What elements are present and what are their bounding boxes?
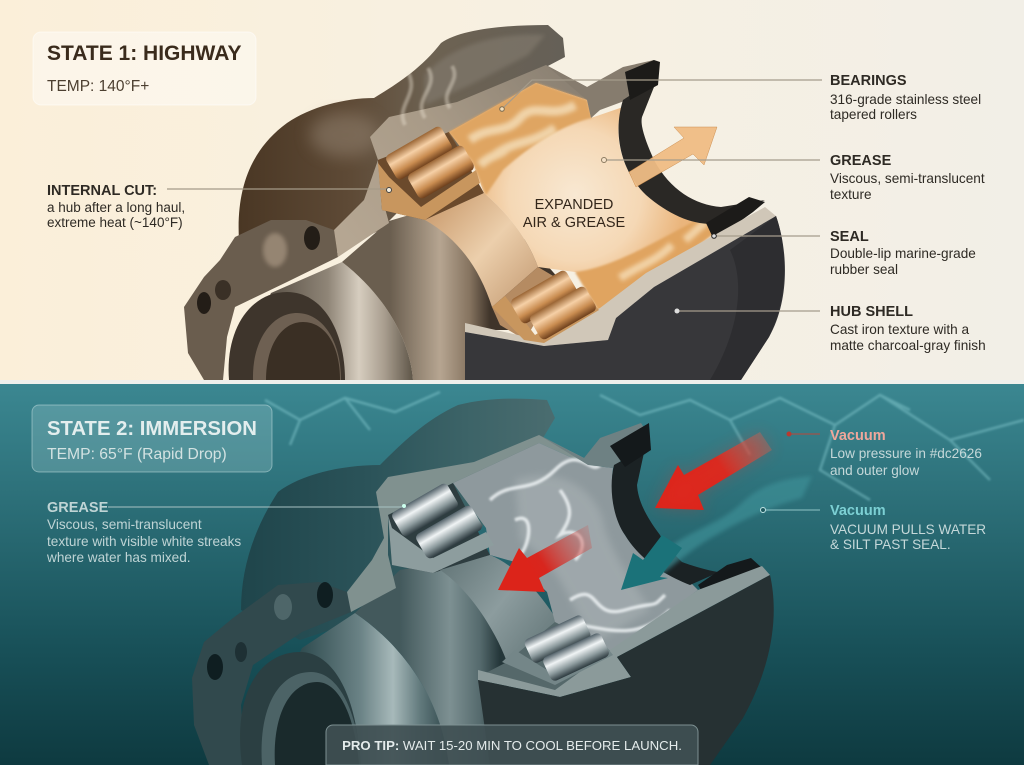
callout: grease: texture bbox=[830, 187, 872, 202]
callout: hub shell: Cast iron texture with a bbox=[830, 322, 969, 337]
callout: bearings: BEARINGS bbox=[830, 73, 907, 89]
chamber bbox=[449, 83, 695, 272]
callout: hub shell: HUB SHELL bbox=[830, 304, 913, 320]
bronze bottom filler bbox=[492, 267, 553, 336]
grease upper highlights bbox=[470, 105, 575, 165]
flow arrow bbox=[629, 127, 717, 187]
label: expanded air and grease: AIR & GREASE bbox=[523, 215, 625, 231]
grease upper bbox=[449, 83, 592, 195]
callout: hub shell: matte charcoal-gray finish bbox=[830, 338, 986, 353]
upper roller cage bbox=[378, 163, 480, 220]
grease lower bbox=[574, 222, 712, 309]
callout: vacuum pulls water: VACUUM PULLS WATER bbox=[830, 522, 986, 537]
seal top bbox=[610, 423, 651, 467]
callout: seal: rubber seal bbox=[830, 262, 898, 277]
red arrow lower bbox=[498, 525, 592, 592]
panel box: state 2: STATE 2: IMMERSION bbox=[47, 418, 257, 440]
callout: bearings: 316-grade stainless steel bbox=[830, 92, 981, 107]
pro tip bar: PRO TIP: WAIT 15-20 MIN TO COOL BEFORE LAUNCH. bbox=[342, 738, 682, 753]
callout: internal cut bbox=[47, 183, 392, 230]
callout: grease mixed: Viscous, semi-translucent bbox=[47, 517, 202, 532]
flange bolt holes bbox=[207, 582, 333, 680]
panel box: state 2: TEMP: 65°F (Rapid Drop) bbox=[47, 446, 227, 463]
water caustics bbox=[265, 392, 1024, 500]
silver race bbox=[440, 555, 560, 662]
seal housing bbox=[539, 423, 649, 468]
flange bolt holes bbox=[197, 226, 320, 314]
pro tip bar bbox=[326, 725, 698, 765]
bore bbox=[262, 672, 361, 765]
callout: grease mixed: where water has mixed. bbox=[46, 550, 191, 565]
divider bbox=[0, 380, 1024, 384]
callout: vacuum low pressure: and outer glow bbox=[830, 463, 919, 478]
barrel inner bbox=[342, 193, 560, 380]
callout: bearings: tapered rollers bbox=[830, 107, 917, 122]
white water streaks bbox=[490, 460, 670, 631]
callout: grease mixed: texture with visible white streaks bbox=[47, 534, 241, 549]
callout: vacuum pulls water: Vacuum bbox=[830, 503, 886, 519]
upper rollers bbox=[384, 125, 476, 200]
lower cage bbox=[502, 645, 613, 685]
lower shell facet bbox=[710, 216, 784, 380]
panel box: state 1 bbox=[33, 32, 256, 105]
hub cutaway illustration: immersion bbox=[192, 399, 774, 765]
lower rollers bbox=[523, 614, 610, 682]
label: expanded air and grease: EXPANDED bbox=[535, 197, 613, 213]
grease chamber bbox=[453, 443, 698, 652]
callout: grease mixed bbox=[46, 500, 406, 565]
label: expanded air and grease bbox=[523, 199, 625, 227]
shell top lobe highlight bbox=[425, 35, 545, 105]
seal crescent bbox=[619, 77, 765, 224]
roller pocket bbox=[378, 132, 484, 220]
hub back shell bbox=[239, 25, 565, 270]
ring bbox=[240, 652, 360, 765]
seal bottom bbox=[698, 558, 762, 598]
lower roller cage bbox=[492, 296, 599, 343]
barrel inner bbox=[355, 555, 560, 765]
heat wisps bbox=[403, 66, 455, 125]
callout: hub shell bbox=[674, 304, 986, 353]
seal housing bbox=[546, 60, 658, 118]
callout: vacuum low pressure: Low pressure in #dc2626 bbox=[830, 446, 982, 461]
lower shell bbox=[465, 216, 785, 380]
callout: grease mixed: GREASE bbox=[47, 500, 109, 516]
callout: grease bbox=[601, 155, 985, 199]
callout: internal cut: extreme heat (~140°F) bbox=[47, 215, 183, 230]
upper rollers bbox=[390, 482, 484, 560]
lower rollers bbox=[509, 269, 598, 341]
shell left highlight bbox=[310, 113, 380, 157]
grease chamber lighter centre bbox=[515, 476, 650, 640]
bore bbox=[253, 313, 341, 380]
cut face bbox=[334, 65, 587, 257]
lower shell cut band bbox=[465, 207, 776, 346]
seal top bbox=[625, 60, 660, 100]
barrel outer bbox=[270, 262, 413, 380]
callout: seal: SEAL bbox=[830, 229, 869, 245]
upper cage bbox=[388, 515, 494, 573]
callout: vacuum pulls water: & SILT PAST SEAL. bbox=[830, 537, 951, 552]
callout: seal bbox=[711, 231, 976, 274]
seal bottom bbox=[706, 197, 765, 235]
panel box: state 1: STATE 1: HIGHWAY bbox=[47, 42, 241, 65]
bronze race bbox=[425, 193, 538, 307]
barrel outer bbox=[245, 613, 449, 765]
lower shell cut band bbox=[478, 566, 770, 697]
panel box: state 2 bbox=[32, 405, 272, 472]
panel: state 2 immersion bbox=[0, 384, 1024, 765]
roller pocket bbox=[388, 483, 490, 573]
cut face bbox=[347, 435, 588, 612]
seal crescent bbox=[612, 448, 751, 585]
flange bbox=[192, 582, 351, 765]
callout: seal: Double-lip marine-grade bbox=[830, 246, 976, 261]
hub back shell bbox=[241, 399, 555, 640]
red arrow upper bbox=[655, 432, 772, 510]
callout: grease: Viscous, semi-translucent bbox=[830, 171, 985, 186]
water jet bbox=[655, 476, 812, 574]
hub cutaway illustration: highway bbox=[184, 25, 785, 380]
callout: internal cut: a hub after a long haul, bbox=[47, 200, 185, 215]
callout: bearings bbox=[500, 73, 981, 122]
teal arrow bbox=[621, 535, 682, 590]
flange highlight bbox=[263, 233, 287, 267]
callout: grease: GREASE bbox=[830, 153, 892, 169]
flange bbox=[184, 220, 338, 380]
callout: internal cut: INTERNAL CUT: bbox=[47, 183, 157, 199]
panel box: state 1: TEMP: 140°F+ bbox=[47, 78, 149, 95]
panel: state 1 highway bbox=[0, 0, 1024, 380]
callout: vacuum pulls water bbox=[760, 503, 986, 552]
ring bbox=[229, 292, 345, 380]
lower shell bbox=[478, 575, 774, 765]
callout: vacuum low pressure bbox=[786, 428, 982, 478]
lower cut filler bbox=[478, 622, 617, 697]
callout: vacuum low pressure: Vacuum bbox=[830, 428, 886, 444]
grease lower highlights bbox=[620, 222, 706, 278]
